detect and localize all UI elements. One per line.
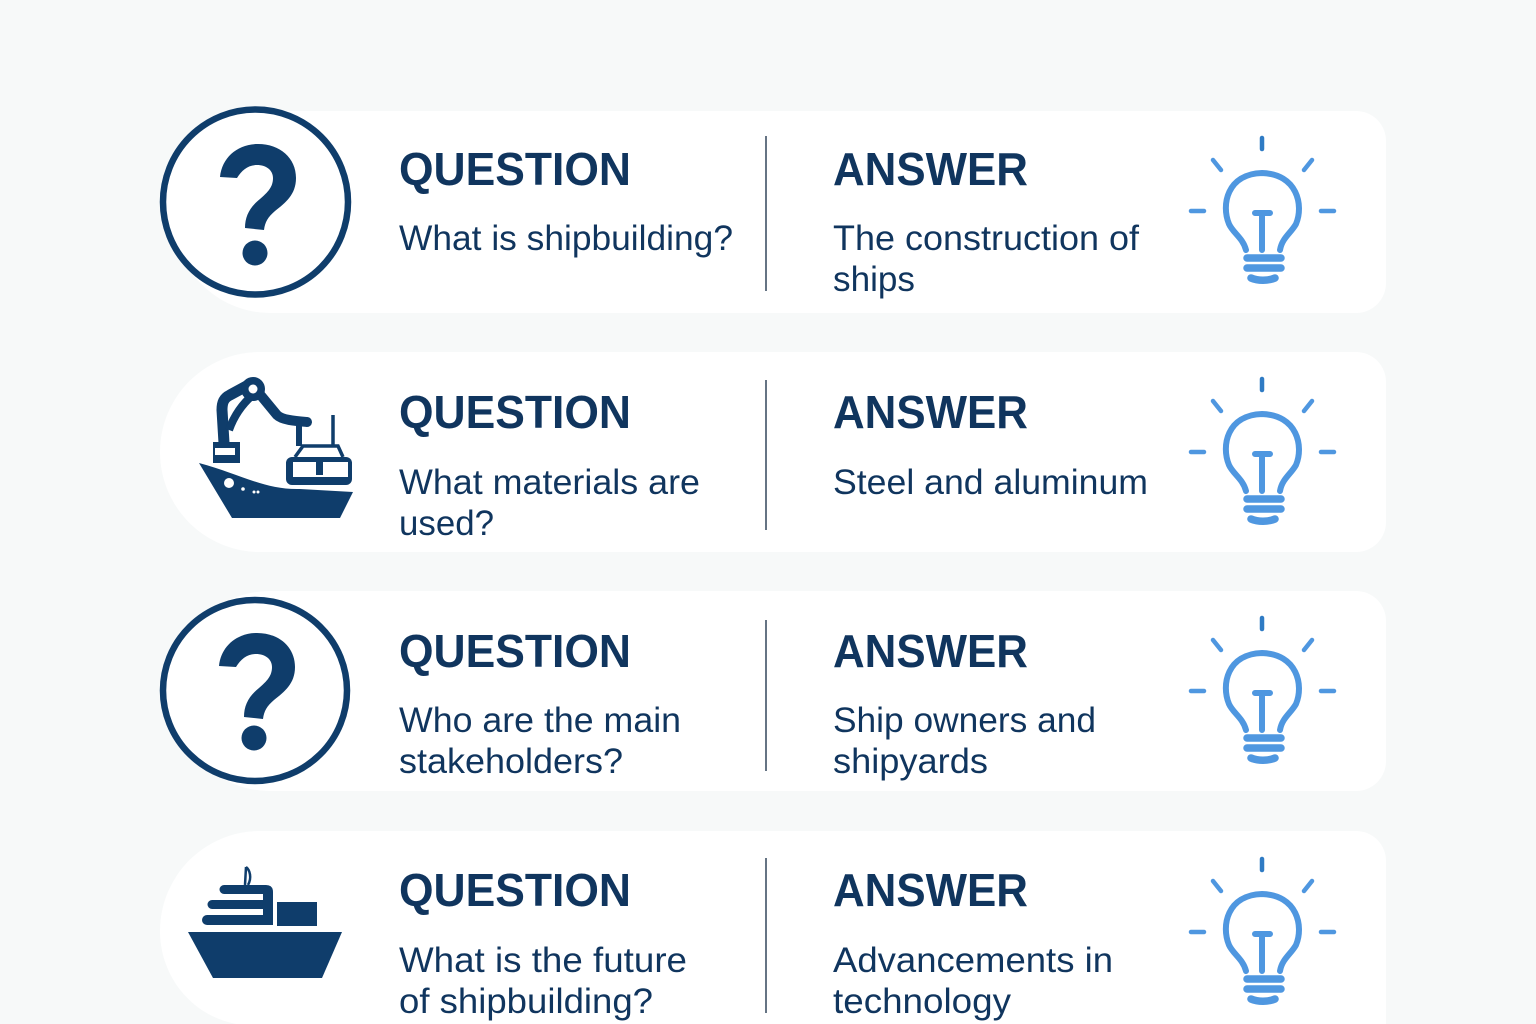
text: question 4: of shipbuilding? (399, 981, 653, 1021)
panel: row 4 future (160, 831, 1386, 1024)
text: answer 4: technology (833, 981, 1011, 1021)
text: answer 4: Advancements in (833, 940, 1113, 980)
panel: row 1 what is shipbuilding (163, 110, 1386, 313)
text: question 4: What is the future (399, 940, 687, 980)
icon: question mark in circle (163, 600, 347, 781)
text: answer 3: shipyards (833, 741, 988, 781)
text: question 2 (399, 462, 700, 543)
panel: row 3 stakeholders (163, 591, 1386, 791)
icon: question mark in circle (163, 110, 348, 294)
heading: question: QUESTION (399, 143, 631, 195)
heading: answer: ANSWER (833, 864, 1028, 916)
icon: cargo ship (188, 867, 342, 978)
heading: answer: ANSWER (833, 625, 1028, 677)
text: answer 2: Steel and aluminum (833, 462, 1148, 502)
panel: row 2 materials (160, 352, 1386, 552)
icon: light bulb (1191, 618, 1334, 760)
text: question 3 (399, 700, 681, 781)
heading: question: QUESTION (399, 386, 631, 438)
heading: answer: ANSWER (833, 386, 1028, 438)
icon: light bulb (1191, 379, 1334, 521)
heading: answer: ANSWER (833, 143, 1028, 195)
text: question 3: Who are the main (399, 700, 681, 740)
heading: question: QUESTION (399, 625, 631, 677)
text: answer 4 (833, 940, 1113, 1021)
text: answer 1 (833, 218, 1139, 299)
text: question 4 (399, 940, 687, 1021)
icon: ship with crane (199, 377, 353, 518)
text: question 1: What is shipbuilding? (399, 218, 733, 258)
text: question 2: used? (399, 503, 494, 543)
text: question 3: stakeholders? (399, 741, 623, 781)
heading: question: QUESTION (399, 864, 631, 916)
text: answer 3: Ship owners and (833, 700, 1096, 740)
text: answer 1: ships (833, 259, 915, 299)
text: answer 1: The construction of (833, 218, 1139, 258)
icon: light bulb (1191, 138, 1334, 280)
icon: light bulb (1191, 859, 1334, 1001)
text: question 2: What materials are (399, 462, 700, 502)
text: answer 3 (833, 700, 1096, 781)
